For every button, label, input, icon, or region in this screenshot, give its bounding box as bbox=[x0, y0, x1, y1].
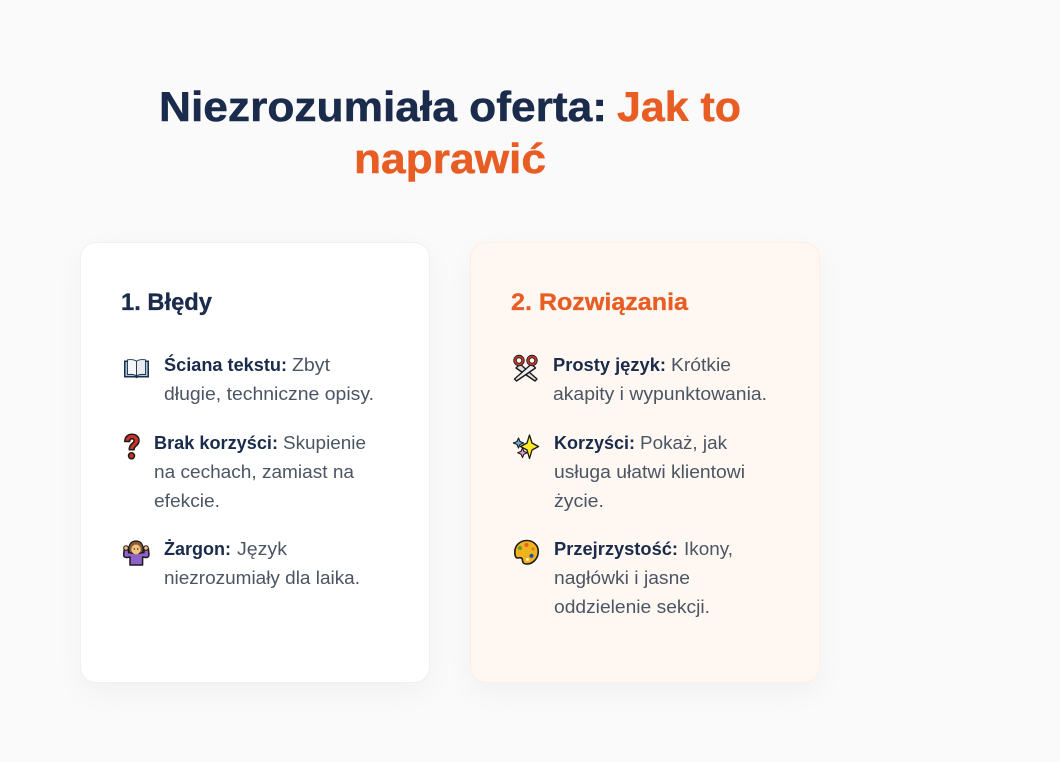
item: żargon: Język bbox=[237, 539, 288, 559]
item: żargon: niezrozumiały dla laika. bbox=[164, 568, 360, 588]
title bbox=[159, 83, 741, 182]
icon: open book bbox=[124, 360, 149, 378]
item: przejrzystość: Przejrzystość: bbox=[554, 539, 678, 559]
item: ściana tekstu: Ściana tekstu: bbox=[164, 354, 287, 375]
item: przejrzystość bbox=[515, 539, 733, 617]
panel: błędy bbox=[80, 242, 430, 683]
item: prosty język: Prosty język: bbox=[553, 355, 666, 375]
item: przejrzystość: oddzielenie sekcji. bbox=[554, 597, 710, 617]
item: korzyści bbox=[513, 433, 745, 511]
item: żargon: Żargon: bbox=[164, 539, 231, 559]
item: korzyści: życie. bbox=[554, 491, 604, 511]
title: Niezrozumiała oferta: bbox=[159, 83, 607, 130]
heading: 2. Rozwiązania: 2. Rozwiązania bbox=[511, 289, 689, 316]
item: prosty język: Krótkie bbox=[671, 355, 731, 375]
item: prosty język: akapity i wypunktowania. bbox=[553, 384, 767, 404]
item: przejrzystość: Ikony, bbox=[684, 539, 733, 559]
panel: rozwiązania bbox=[470, 242, 820, 683]
item: brak korzyści bbox=[125, 433, 366, 511]
item: korzyści: usługa ułatwi klientowi bbox=[554, 462, 745, 482]
item: przejrzystość: nagłówki i jasne bbox=[554, 568, 690, 588]
item: żargon bbox=[124, 539, 360, 588]
item: brak korzyści: Skupienie bbox=[283, 433, 366, 453]
item: ściana tekstu: Zbyt bbox=[292, 355, 330, 375]
title: Jak to bbox=[617, 83, 741, 130]
item: brak korzyści: efekcie. bbox=[154, 491, 220, 511]
heading: 1. Błędy: 1. Błędy bbox=[121, 289, 213, 316]
item: prosty język bbox=[514, 355, 767, 404]
icon: shrugging person bbox=[124, 541, 149, 565]
item: korzyści: Korzyści: bbox=[554, 433, 635, 453]
item: brak korzyści: Brak korzyści: bbox=[154, 433, 278, 453]
icon: red question mark bbox=[125, 434, 139, 459]
item: ściana tekstu bbox=[124, 354, 374, 404]
icon: scissors bbox=[514, 356, 537, 381]
icon: sparkles bbox=[513, 435, 538, 458]
icon: painter's palette bbox=[515, 540, 538, 564]
item: korzyści: Pokaż, jak bbox=[640, 433, 728, 453]
title: naprawić bbox=[354, 135, 546, 182]
item: ściana tekstu: długie, techniczne opisy. bbox=[164, 384, 374, 404]
item: brak korzyści: na cechach, zamiast na bbox=[154, 462, 355, 482]
